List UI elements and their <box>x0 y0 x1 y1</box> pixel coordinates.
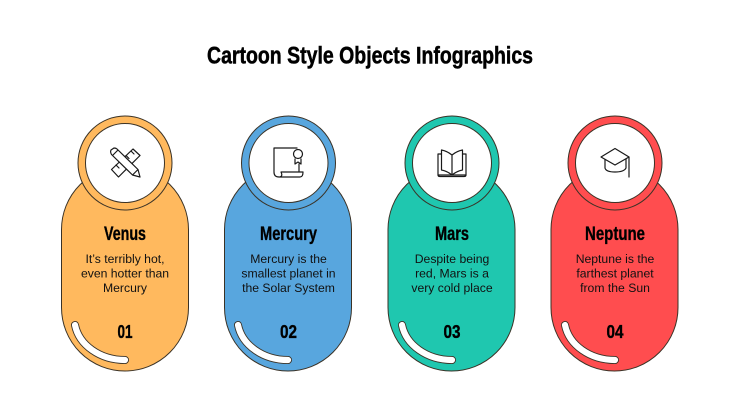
number: 02 <box>280 322 297 342</box>
card body <box>388 166 515 371</box>
icon: graduation cap <box>601 148 629 177</box>
icon ring <box>568 116 662 210</box>
highlight <box>402 325 452 360</box>
heading: Mars <box>435 224 469 245</box>
panel: Mercury <box>224 116 352 371</box>
body text: the Solar System <box>242 281 335 295</box>
icon: ruler and pencil <box>111 148 140 177</box>
number: 01 <box>118 322 132 342</box>
highlight <box>565 325 615 360</box>
panel: Neptune <box>551 116 678 371</box>
body text: Neptune is the <box>576 252 655 266</box>
heading: Mercury <box>260 224 317 245</box>
card body <box>62 166 188 371</box>
highlight <box>75 325 125 360</box>
body text: smallest planet in <box>241 266 336 280</box>
card body <box>224 166 352 371</box>
panel: Mars <box>388 116 515 371</box>
icon circle <box>86 124 164 202</box>
number: 04 <box>606 322 624 342</box>
card body <box>551 166 678 371</box>
panel: Venus <box>62 116 188 371</box>
icon circle <box>249 124 328 202</box>
number: 03 <box>444 322 460 342</box>
body text: very cold place <box>411 281 493 295</box>
title: Cartoon Style Objects Infographics <box>207 42 533 70</box>
heading: Venus <box>104 224 146 245</box>
icon circle <box>576 124 654 202</box>
body text: Mercury <box>103 281 148 295</box>
icon ring <box>242 116 336 210</box>
icon: diploma scroll <box>274 148 303 177</box>
icon: open book <box>438 150 466 176</box>
body text: Despite being <box>415 252 489 266</box>
body text: farthest planet <box>576 266 654 280</box>
highlight <box>238 325 288 360</box>
body text: even hotter than <box>81 266 169 280</box>
body text: Mercury is the <box>250 252 327 266</box>
icon ring <box>78 116 172 210</box>
icon circle <box>412 124 492 202</box>
icon ring <box>405 116 499 210</box>
body text: red, Mars is a <box>415 266 489 280</box>
heading: Neptune <box>585 224 645 245</box>
body text: from the Sun <box>580 281 650 295</box>
body text: It’s terribly hot, <box>85 252 165 266</box>
